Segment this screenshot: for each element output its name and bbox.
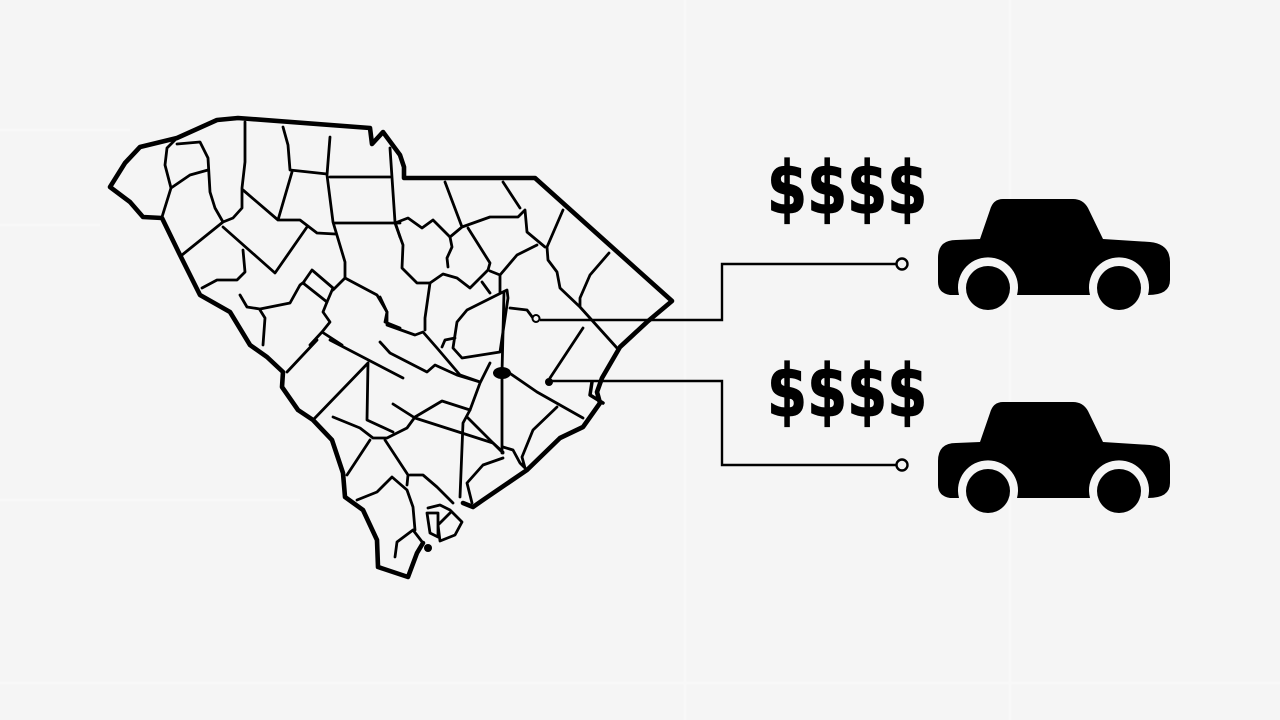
blobs at county junctions	[424, 367, 553, 552]
map: South Carolina counties	[110, 118, 672, 577]
state outline	[110, 118, 672, 577]
dollar signs: upper: $$$$	[767, 147, 927, 231]
icon: lower car	[938, 402, 1170, 513]
connector: lower car	[550, 381, 908, 470]
icon: upper car	[938, 199, 1170, 310]
dollar signs: lower: $$$$	[767, 350, 927, 434]
coastal hook	[590, 382, 603, 403]
county borders	[162, 122, 617, 557]
connector: upper car	[532, 258, 908, 322]
